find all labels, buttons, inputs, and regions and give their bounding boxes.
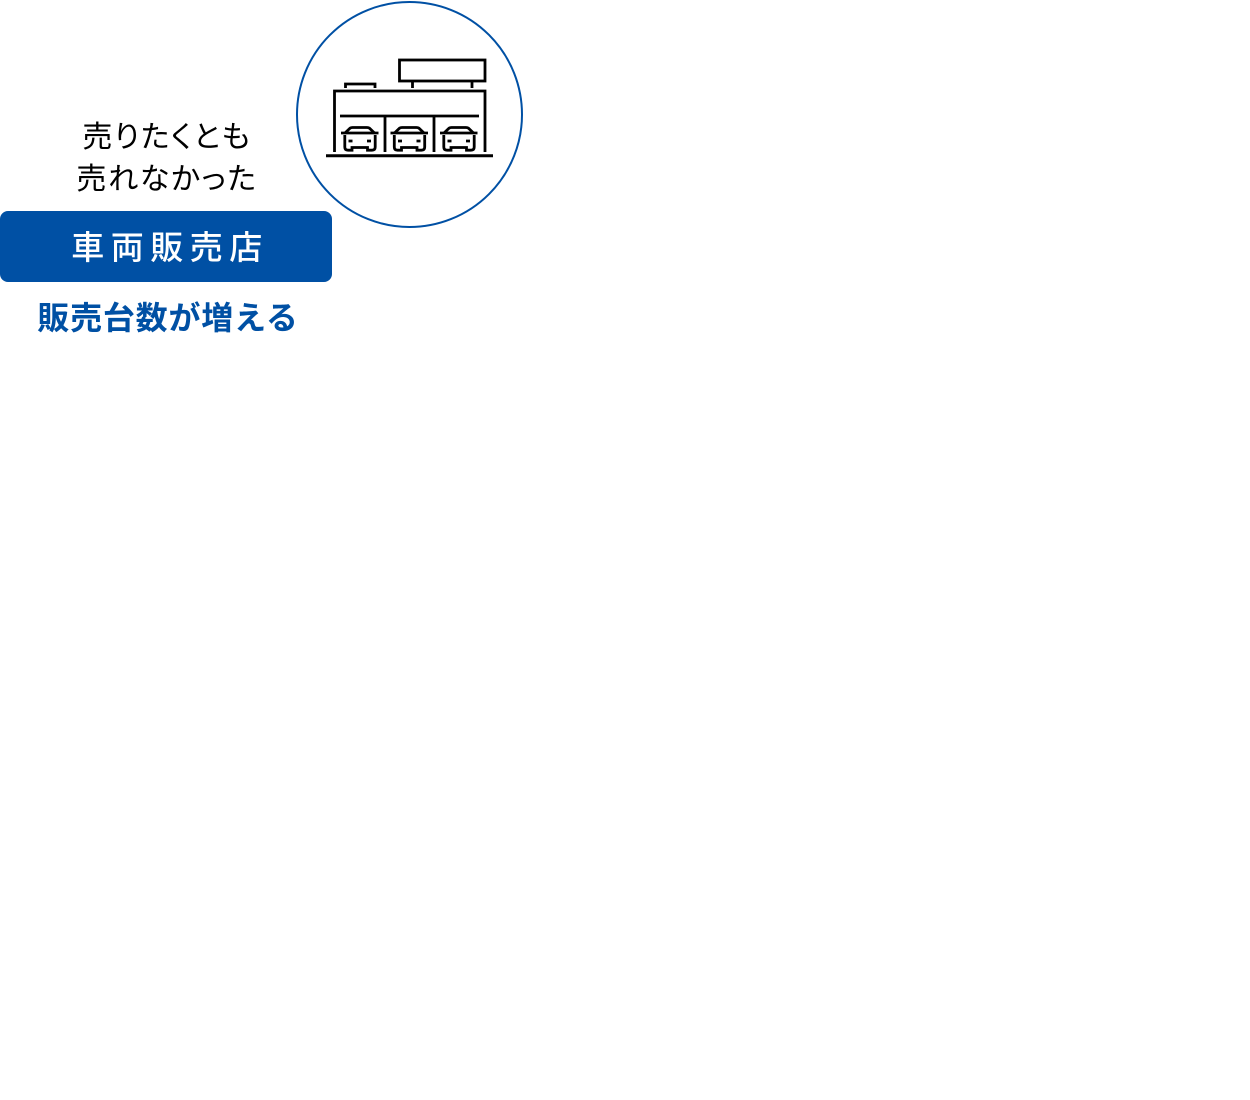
text: result copy: 販売台数が増える bbox=[37, 300, 299, 336]
text: lead-in copy: 売れなかった bbox=[76, 163, 258, 196]
label: blue banner: 車両販売店 bbox=[71, 229, 269, 266]
icon: dealership building bbox=[326, 60, 493, 156]
label: blue banner bbox=[0, 211, 332, 282]
text: lead-in copy bbox=[76, 121, 258, 196]
text: lead-in copy: 売りたくとも bbox=[82, 121, 252, 154]
icon circle outline bbox=[297, 2, 522, 227]
icon: car dealership in circle bbox=[296, 1, 523, 228]
